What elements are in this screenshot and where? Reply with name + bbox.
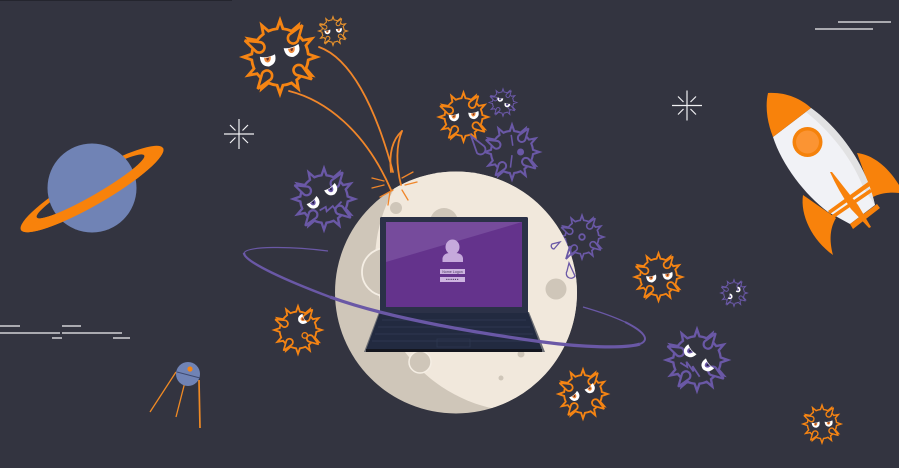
virus: purple with crack and detached spike xyxy=(471,125,539,179)
virus: small orange bottom right xyxy=(803,405,841,443)
laptop screen xyxy=(380,217,528,313)
orbit ring xyxy=(244,247,645,347)
virus: orange bottom centre xyxy=(558,370,608,418)
virus: big orange with trail xyxy=(243,20,317,94)
virus: orange right of moon xyxy=(634,253,682,301)
impact trails and sparks xyxy=(289,47,417,205)
virus: broken purple behind moon xyxy=(560,215,604,259)
rocket window xyxy=(792,127,822,157)
virus: small orange top xyxy=(318,17,347,45)
username field: Nome Logon xyxy=(442,270,463,274)
virus: orange lower left one-eyed xyxy=(274,306,322,354)
moon craters xyxy=(362,202,566,380)
password field: •••••• xyxy=(446,277,459,282)
rocket body xyxy=(773,108,875,224)
detached droplets xyxy=(551,242,575,278)
rocket right fin xyxy=(857,153,899,197)
virus: big purple lower right xyxy=(666,329,728,391)
virus: small purple top xyxy=(489,89,517,116)
planet: ringed saturn xyxy=(20,144,164,232)
moon xyxy=(335,172,577,414)
speed lines: top right xyxy=(815,22,891,29)
rocket left fin xyxy=(803,195,836,255)
speed lines: left xyxy=(0,326,130,338)
username field xyxy=(440,269,465,274)
password field xyxy=(440,277,465,282)
detached spike xyxy=(471,136,485,154)
rocket nose xyxy=(767,93,811,137)
rocket body shade xyxy=(806,108,875,205)
laptop xyxy=(364,217,545,352)
virus: small purple right xyxy=(720,280,747,306)
icon: sparkle star right xyxy=(672,90,702,120)
user avatar icon xyxy=(442,240,463,262)
icon: sparkle star left xyxy=(224,119,254,149)
rocket xyxy=(767,93,899,255)
laptop base xyxy=(364,312,545,352)
virus: purple left of moon xyxy=(293,168,355,230)
top edge line xyxy=(0,0,232,1)
rocket stripes xyxy=(828,172,880,229)
virus: orange centre top xyxy=(439,92,488,142)
satellite xyxy=(150,362,200,428)
